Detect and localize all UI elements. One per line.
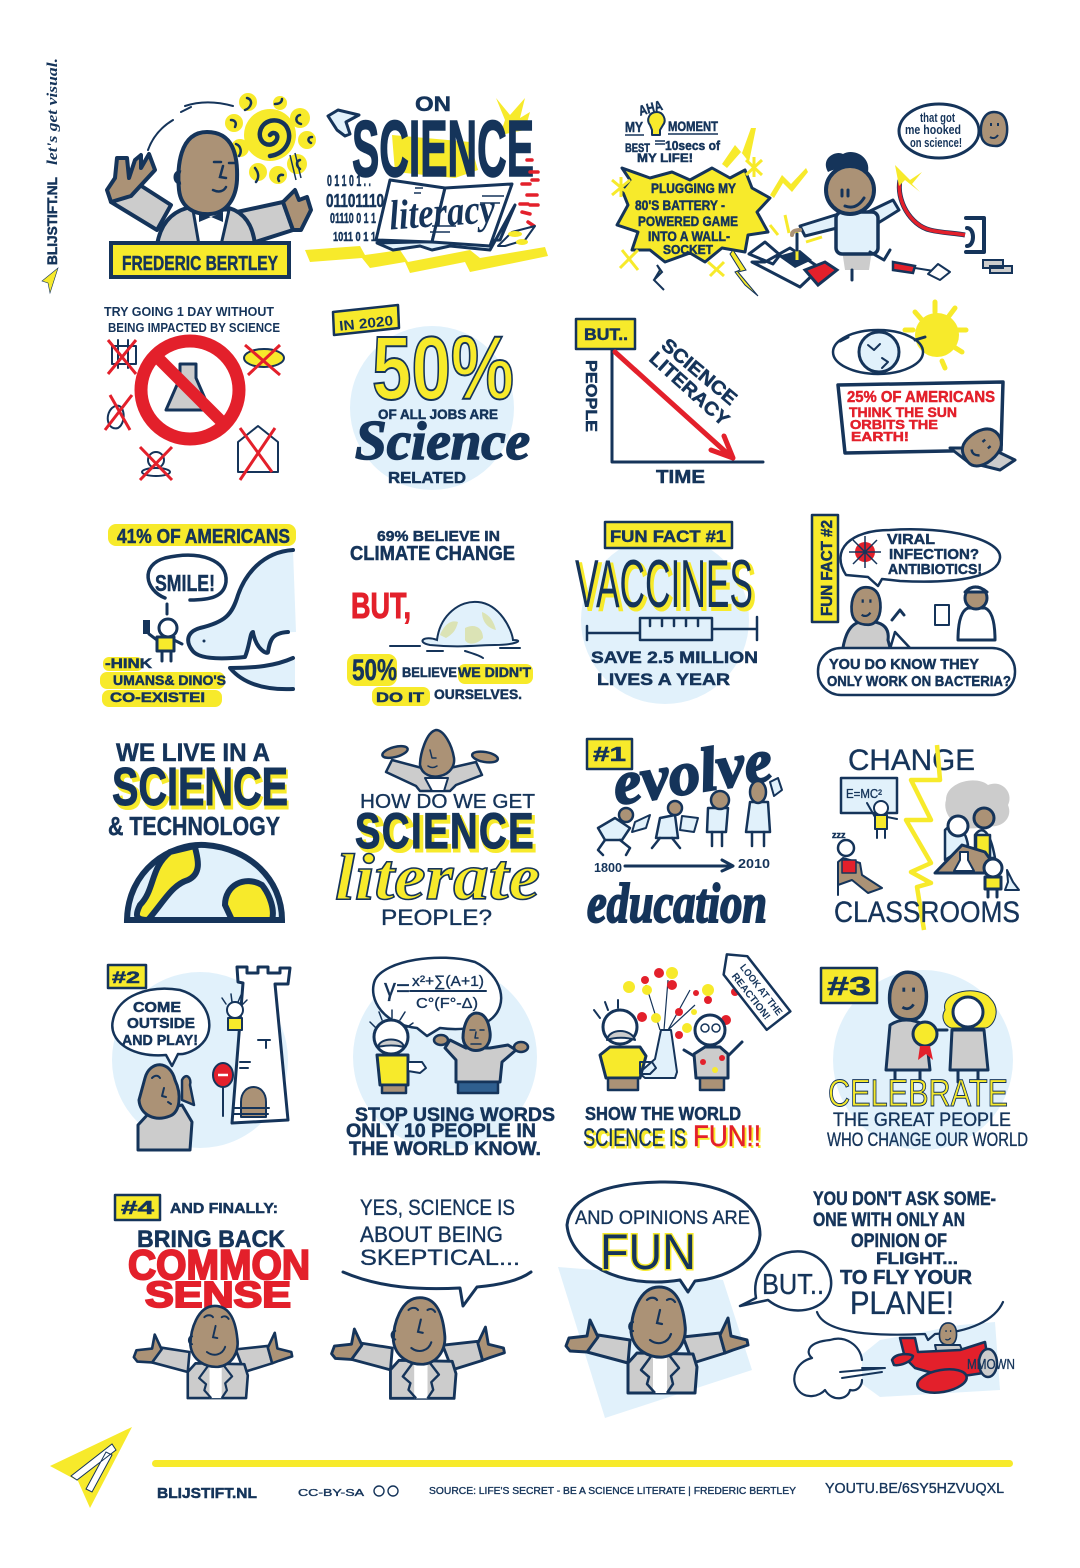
panel: 50% jobs: [333, 305, 530, 490]
callout box: 25% OF AMERICANS: [847, 389, 995, 406]
callout box: THINK THE SUN: [849, 404, 957, 420]
panel: science and technology: & TECHNOLOGY: [108, 811, 280, 841]
headline: SCIENCE: [112, 757, 288, 817]
icon: prohibited flask: [141, 341, 239, 439]
sign: REACTION!: [729, 971, 772, 1022]
label: in 2020: [333, 305, 399, 335]
stats text: [347, 654, 533, 706]
icon: open book: literacy: [388, 186, 497, 239]
scene: old classroom: [832, 778, 897, 895]
panel: science literate people: PEOPLE?: [381, 905, 492, 930]
panel: skeptical: [332, 1195, 531, 1398]
speech bubble: bacteria: [818, 632, 1015, 695]
text: [104, 304, 280, 335]
figure: Bertley shrug: [381, 730, 499, 791]
headline: SCIENCE: [355, 803, 535, 859]
smile bubble: [148, 555, 226, 614]
panel: science and technology: [108, 739, 289, 920]
speech bubble: formula: [373, 958, 501, 1036]
figure: scientist two: [684, 1015, 742, 1090]
panel: change classrooms: CLASSROOMS: [834, 896, 1020, 929]
trend arrow: [615, 352, 733, 458]
icon: syringe: [587, 617, 757, 640]
callout burst: SOCKET: [663, 242, 713, 257]
icon: lightning: [906, 745, 940, 930]
speech bubble: FUN: [600, 1224, 696, 1280]
icon: game console: [749, 215, 837, 287]
caption highlight text: UMANS& DINO'S: [113, 672, 226, 688]
footer text: BLIJSTIFT.NL: [157, 1485, 257, 1502]
panel: vaccines: LIVES A YEAR: [597, 670, 730, 689]
smile bubble: SMILE!: [155, 570, 215, 596]
panel: common sense: AND FINALLY:: [170, 1200, 278, 1217]
panel: science and technology: WE LIVE IN A: [116, 739, 270, 767]
script word: literate: [335, 841, 540, 914]
figure: scientist one: [594, 1000, 656, 1090]
panel: fly your plane: OPINION OF: [851, 1231, 947, 1252]
headline: SCIENCE IS: [583, 1124, 686, 1152]
icon: flask: [639, 1030, 677, 1078]
panel: fly your plane: ONE WITH ONLY AN: [813, 1210, 965, 1231]
panel: fly your plane: [740, 1189, 1015, 1398]
speech bubble: FUN: [600, 1224, 696, 1280]
speech bubble: AND OPINIONS ARE: [575, 1208, 750, 1229]
stats text: DO IT: [376, 689, 425, 705]
speech bubble: that got: [920, 110, 955, 125]
heading: aha moment: MY: [625, 119, 643, 136]
speech bubble: bacteria: YOU DO KNOW THEY: [829, 656, 979, 673]
figure: Bertley big: [566, 1287, 748, 1393]
portrait: Bertley: [107, 132, 311, 246]
icon: red cable and socket: [895, 165, 984, 252]
panel: vaccines: [575, 522, 758, 704]
script word: education: education: [587, 873, 767, 935]
sidebar brand: let's get visual.: [45, 58, 61, 165]
icon: plane: [892, 1323, 1015, 1396]
scene: new classroom: [935, 780, 1019, 897]
scene: old classroom: E=MC²: [846, 786, 883, 801]
label: number 3: [821, 968, 877, 1003]
label: in 2020: IN 2020: [338, 312, 394, 334]
panel: day without science: [104, 304, 284, 480]
footer text: CC-BY-SA: [298, 1488, 364, 1499]
big stat: 50%: [372, 319, 514, 419]
caption highlight text: [100, 655, 226, 707]
headline: VACCINES: [575, 546, 753, 622]
binary digits: 1011 0 1 1: [333, 229, 376, 244]
callout burst: INTO A WALL-: [648, 228, 730, 244]
figure: Bertley: [332, 1298, 504, 1398]
pen: [498, 226, 535, 246]
label: number 1: [587, 739, 632, 769]
dinosaur: [188, 550, 296, 690]
sign: [715, 945, 790, 1030]
speech curve: [343, 1272, 531, 1306]
panel: stop using words: STOP USING WORDS: [355, 1105, 555, 1126]
panel: skeptical: YES, SCIENCE IS: [360, 1195, 515, 1220]
panel: stop using words: ONLY 10 PEOPLE IN: [346, 1121, 536, 1142]
label: number 4: #4: [121, 1198, 154, 1218]
label: number 2: [108, 965, 146, 988]
panel: show fun: SHOW THE WORLD: [585, 1104, 741, 1124]
figure: professor: [370, 1010, 426, 1093]
heading: aha moment: MOMENT: [668, 118, 718, 134]
headline: FUN!!: [695, 1122, 763, 1155]
speech bubble: viral: [840, 529, 1000, 586]
icon: stop sign: [213, 1063, 233, 1116]
panel: on science literacy title: ON: [415, 93, 451, 116]
callout burst: PLUGGING MY: [651, 180, 737, 196]
headline: VACCINES: [578, 549, 756, 625]
panel: vaccines: SAVE 2.5 MILLION: [591, 648, 758, 667]
panel: common sense: [115, 1195, 310, 1398]
speech bubble: formula: C°(F°-Δ): [416, 995, 478, 1012]
speech bubble: viral: ANTIBIOTICS!: [888, 561, 982, 578]
figure: kid: [143, 619, 182, 661]
label: number 4: [115, 1195, 160, 1220]
icon: small potato head: [981, 112, 1007, 146]
label: fun fact 1: FUN FACT #1: [610, 527, 726, 546]
speech bubble: AND PLAY!: [122, 1032, 198, 1049]
speech bubble: but: [740, 1251, 831, 1310]
explosion dots: [623, 967, 739, 1063]
headline: SCIENCE: [358, 806, 536, 862]
sidebar brand: [42, 58, 61, 293]
callout burst: [617, 168, 770, 262]
label: fun fact 2: [812, 515, 838, 622]
speech bubble: OUTSIDE: [127, 1015, 195, 1032]
panel: literacy over time chart: SCIENCE: [657, 335, 741, 410]
script word: Science: [355, 410, 530, 472]
panel: change classrooms: [832, 744, 1020, 930]
panel: climate change: CLIMATE CHANGE: [350, 543, 515, 565]
icon: exhaust cloud: [794, 1339, 885, 1398]
figure: lying Bertley: [950, 422, 1015, 472]
figure: honoree: [943, 991, 996, 1082]
label: number 1: #1: [593, 744, 626, 766]
speech bubble: formula: γ=: [384, 975, 410, 1002]
footer: [50, 1427, 1013, 1508]
panel: fly your plane: YOU DON'T ASK SOME-: [813, 1189, 996, 1210]
icon: flask: [328, 110, 359, 136]
headline: [128, 1241, 310, 1315]
figures: patient and doctor: [842, 587, 995, 655]
panel: show fun: [583, 945, 790, 1155]
panel: fly your plane: TO FLY YOUR: [840, 1267, 973, 1289]
heading: aha moment: 10secs of: [665, 138, 721, 153]
heading: aha moment: MY LIFE!: [637, 151, 693, 165]
scene: old classroom: zzz: [832, 830, 846, 840]
headline: 41% OF AMERICANS: [117, 526, 290, 548]
speech bubble: me hooked: [905, 122, 961, 137]
speech bubble: bacteria: ONLY WORK ON BACTERIA?: [827, 673, 1011, 690]
icon: sun: [905, 302, 966, 368]
speech bubble: [112, 989, 209, 1066]
panel: come outside: [108, 965, 290, 1150]
headline: SENSE: [145, 1274, 291, 1315]
timeline arrow: 1800: [594, 860, 622, 875]
speech bubble: but: BUT..: [762, 1269, 824, 1301]
text: BEING IMPACTED BY SCIENCE: [108, 320, 280, 335]
binary digits: [326, 173, 384, 244]
heading: aha moment: [625, 97, 721, 165]
figure: kid with plug: [792, 152, 899, 280]
panel: celebrate: [821, 968, 1028, 1151]
panel: literacy over time chart: PEOPLE: [582, 360, 599, 432]
label: number 3: #3: [827, 971, 871, 1001]
icon: plane: MMOWN: [967, 1356, 1015, 1373]
speech bubble: formula: x²+∑(A+1): [412, 973, 484, 990]
speech bubble: viral: INFECTION?: [889, 546, 979, 563]
binary digits: 0 1 1 0 1 . .: [327, 173, 371, 190]
headline: [583, 1120, 763, 1155]
speech bubble: [899, 104, 979, 158]
panel: evolve education: [587, 727, 782, 935]
caption highlight text: -HINK: [105, 655, 152, 671]
label: fun fact 2: FUN FACT #2: [819, 520, 836, 616]
panel: fly your plane: FLIGHT...: [876, 1249, 958, 1268]
icons: lightning bolts: [612, 128, 808, 296]
panel: 50% jobs: OF ALL JOBS ARE: [378, 406, 498, 422]
heading: aha moment: BEST: [625, 141, 651, 155]
speech bubble: viral: VIRAL: [887, 531, 935, 548]
timeline arrow: 2010: [738, 856, 770, 871]
stats text: BELIEVE: [402, 664, 457, 680]
panel: science literate people: [335, 730, 540, 930]
panel: antibiotics: [812, 515, 1015, 695]
panel: literacy over time chart: TIME: [656, 467, 705, 487]
callout burst: 80'S BATTERY -: [635, 197, 725, 213]
icon: spiral sun: [225, 93, 316, 184]
headline: CELEBRATE: [828, 1073, 1008, 1115]
stats text: OURSELVES.: [434, 686, 522, 702]
icon: tower: [222, 967, 290, 1123]
footer text: SOURCE: LIFE'S SECRET - BE A SCIENCE LITERATE | FREDERIC BERTLEY: [429, 1486, 796, 1497]
headline: [575, 546, 756, 625]
binary digits: 01101110: [326, 191, 384, 211]
panel: sun orbit: [833, 302, 1015, 472]
banner: name: FREDERIC BERTLEY: [122, 253, 279, 275]
timeline arrow: [594, 856, 770, 875]
footer text: [157, 1480, 1004, 1502]
panel: change classrooms: CHANGE: [848, 744, 975, 777]
script word: evolve: evolve: [608, 727, 777, 819]
stats text: WE DIDN'T: [458, 664, 531, 680]
callout box: [838, 382, 1003, 453]
binary digits: 01110 0 1 1: [330, 210, 376, 227]
icon: paper plane logo: [50, 1427, 132, 1508]
panel: climate change: 69% BELIEVE IN: [377, 528, 500, 545]
figure: Bertley: [434, 1013, 528, 1093]
caption highlight text: CO-EXISTEI: [110, 689, 205, 705]
panel: climate change: [347, 528, 533, 706]
figures: evolving people: [598, 778, 782, 855]
icons: crossed items: [105, 340, 284, 480]
label: fun fact 1: [605, 522, 732, 548]
callout burst: POWERED GAME: [638, 213, 738, 229]
panel: literacy over time chart: [576, 319, 763, 487]
callout box: ORBITS THE: [850, 417, 938, 432]
label: but: BUT..: [584, 325, 628, 344]
icons: tools: [893, 260, 1012, 280]
heading: aha moment: AHA: [637, 97, 664, 119]
label: number 2: #2: [112, 968, 140, 987]
panel: 50% jobs: RELATED: [388, 470, 466, 487]
panel: celebrate: WHO CHANGE OUR WORLD: [827, 1130, 1028, 1151]
red splashes: [520, 160, 538, 226]
speech bubble: [567, 1182, 760, 1292]
panel: Frederic Bertley: [107, 93, 316, 277]
panel: on science literacy title: [305, 93, 548, 273]
headline: FUN!!: [693, 1120, 761, 1153]
sidebar brand: BLIJSTIFT.NL: [44, 177, 60, 265]
headline: SCIENCE IS: [585, 1126, 688, 1154]
icon: melting earth: [390, 602, 520, 658]
panel: aha moment: [612, 97, 1012, 296]
figure: Bertley with medal: [886, 972, 947, 1080]
panel: stop using words: [346, 958, 555, 1160]
panel: science literate people: HOW DO WE GET: [360, 791, 535, 813]
panel: skeptical: SKEPTICAL...: [360, 1245, 520, 1270]
stats text: 50%: [352, 654, 397, 687]
panel: literacy over time chart: LITERACY: [645, 348, 733, 431]
panel: common sense: BRING BACK: [137, 1226, 286, 1253]
figure: Bertley calling: [138, 1065, 194, 1150]
icon: earth dome: [127, 845, 282, 920]
callout box: EARTH!: [851, 429, 909, 444]
speech bubble: COME: [133, 999, 181, 1016]
sign: LOOK AT THE: [737, 962, 784, 1018]
footer text: YOUTU.BE/6SY5HZVUQXL: [825, 1480, 1004, 1497]
panel: celebrate: THE GREAT PEOPLE: [833, 1110, 1011, 1131]
panel: stop using words: THE WORLD KNOW.: [349, 1139, 541, 1160]
panel: humans and dinos: [100, 524, 296, 707]
label: but: [576, 319, 635, 349]
banner: name: [111, 243, 289, 277]
speech bubble: on science!: [910, 135, 962, 150]
panel: fly your plane: PLANE!: [850, 1285, 954, 1321]
headline: COMMON: [128, 1241, 310, 1288]
text: TRY GOING 1 DAY WITHOUT: [104, 304, 274, 319]
title word: SCIENCE: [352, 104, 534, 193]
panel: climate change: BUT,: [351, 585, 411, 626]
figure: Bertley: [134, 1306, 292, 1398]
headline: SCIENCE: [115, 760, 289, 820]
panel: opinions are fun: [558, 1182, 760, 1418]
icon: earth orbit: [833, 330, 925, 374]
highlight swashes: [305, 98, 548, 273]
panel: skeptical: ABOUT BEING: [360, 1222, 503, 1247]
